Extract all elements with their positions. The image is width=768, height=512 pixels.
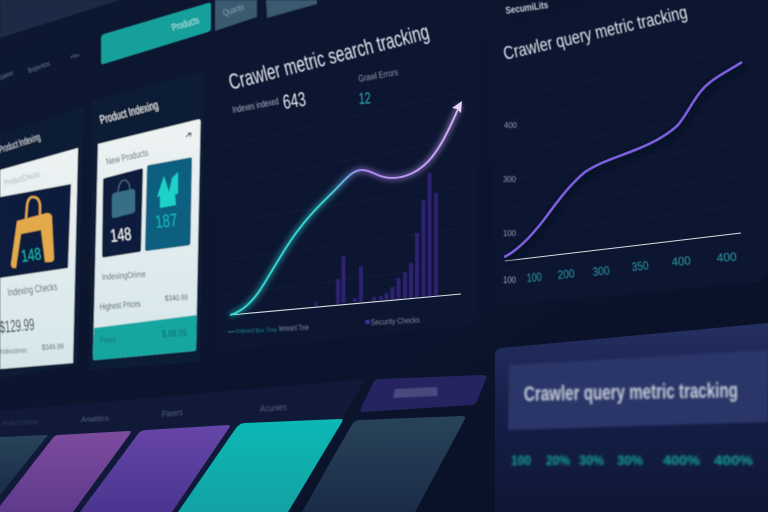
x axis labels: 400 xyxy=(716,250,737,265)
card: magenta xyxy=(0,431,131,512)
legend: tereeard Time xyxy=(279,323,309,333)
percentage labels: 400% xyxy=(663,452,701,468)
card: slate left xyxy=(0,435,48,495)
product card: Indexstines xyxy=(0,346,27,356)
x axis labels xyxy=(503,250,737,286)
tab: products: Products xyxy=(171,15,201,34)
nav labels: Hits xyxy=(70,52,81,61)
product card: $349.99 xyxy=(42,342,64,352)
percentage labels: 30% xyxy=(617,452,644,468)
percentage labels: 30% xyxy=(579,452,604,468)
title band xyxy=(508,350,768,430)
stat: indexes indexed: 643 xyxy=(281,89,307,114)
tab: products xyxy=(101,3,211,64)
product card xyxy=(93,119,200,360)
product card: Indexing Checks xyxy=(7,281,58,299)
product card: Highest Prices xyxy=(99,298,141,312)
category labels: Product checks xyxy=(2,417,39,428)
panel: product indexing xyxy=(89,71,205,370)
nav labels xyxy=(0,52,81,82)
footer: price xyxy=(93,315,197,360)
panel: left product indexing xyxy=(0,106,84,378)
panel: right bottom stack xyxy=(302,375,487,512)
tile: shirt 187 xyxy=(145,157,192,251)
icon: arrowhead xyxy=(452,101,462,113)
card: purple xyxy=(80,425,230,512)
product card xyxy=(0,148,78,369)
value: 148 xyxy=(20,244,42,266)
percentage labels: 400% xyxy=(714,452,754,468)
percentage labels: 20% xyxy=(546,452,570,468)
nav labels: Bopentos xyxy=(27,60,52,75)
footer: price: $,88.99 xyxy=(162,328,187,340)
price: $129.99 xyxy=(0,315,35,337)
bar chart: security checks xyxy=(314,173,438,307)
tile: bag 148 xyxy=(102,168,143,258)
heading: Product Indexing xyxy=(98,98,160,127)
tile: shirt 187: 187 xyxy=(154,210,178,232)
y axis labels xyxy=(503,120,517,238)
category labels: Pavers xyxy=(161,407,183,419)
product card: New Products xyxy=(105,147,150,168)
x axis labels: 100 xyxy=(526,270,542,285)
panel: crawler query metric tracking xyxy=(492,0,768,306)
legend xyxy=(228,315,420,335)
x axis labels: 400 xyxy=(671,253,691,269)
y axis labels: 400 xyxy=(504,120,517,130)
product card: IndexingOrime xyxy=(101,269,146,282)
legend: Indexed Box Time xyxy=(236,327,277,335)
icon: arrow xyxy=(186,133,191,137)
stat: crawl errors: Grawl Errors xyxy=(358,67,399,85)
line chart: curve xyxy=(230,105,460,315)
x axis labels: 300 xyxy=(592,263,610,279)
tile: bag 148: 148 xyxy=(109,224,132,246)
line chart: curve xyxy=(504,62,742,257)
x axis labels: 100 xyxy=(503,275,516,286)
x axis labels: 200 xyxy=(557,266,575,282)
percentage labels: 100 xyxy=(511,452,531,468)
tab: third xyxy=(266,0,317,18)
stat: crawl errors: 12 xyxy=(358,90,371,108)
footer: price: Prices xyxy=(100,335,116,345)
product card: ProductChecks xyxy=(3,169,41,188)
tab: quants xyxy=(215,0,257,31)
card: slate right xyxy=(302,416,465,512)
legend: Security Checks xyxy=(371,315,420,327)
category labels xyxy=(2,402,287,428)
icon: bag xyxy=(11,197,54,268)
y axis labels: 100 xyxy=(503,228,516,238)
panel: crawler query summary xyxy=(495,323,768,512)
panel: crawler metric search tracking xyxy=(218,0,478,352)
percentage labels xyxy=(511,452,754,468)
line chart: shadow xyxy=(505,66,743,261)
category labels: Acunies xyxy=(258,402,287,414)
card: teal xyxy=(178,419,343,512)
category labels: Analitics xyxy=(80,414,109,424)
y axis labels: 300 xyxy=(503,174,516,184)
button header xyxy=(360,375,487,412)
stat: indexes indexed: Indexes indexed xyxy=(231,96,280,116)
product card: $340.99 xyxy=(165,293,189,303)
panel: bottom categories xyxy=(0,379,365,512)
top navigation bar xyxy=(0,0,120,82)
stat: crawl errors xyxy=(358,67,399,108)
x axis labels: 350 xyxy=(631,258,649,274)
axis line xyxy=(505,233,741,261)
line chart axis xyxy=(230,294,461,315)
line chart: glow xyxy=(230,105,460,315)
